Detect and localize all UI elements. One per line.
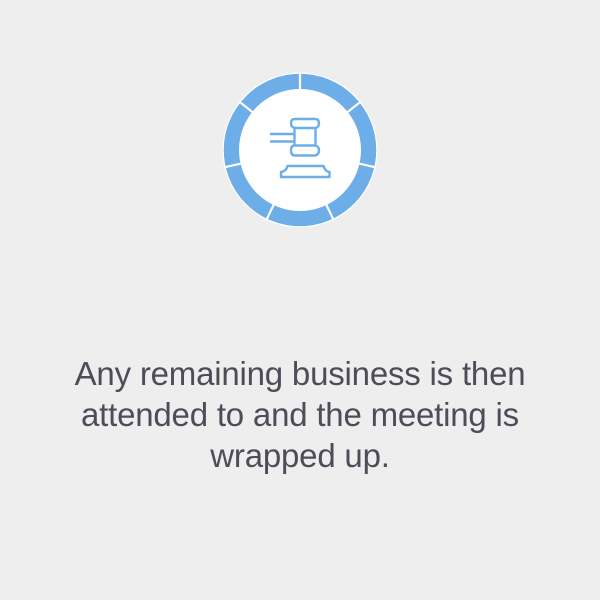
- caption text: attended to and the meeting is: [81, 396, 519, 433]
- caption text: wrapped up.: [210, 437, 390, 474]
- icon: gavel: [270, 119, 330, 177]
- ring: seven blue segments: [222, 72, 378, 228]
- inner white disc: [239, 89, 361, 211]
- caption text: [74, 355, 525, 474]
- caption text: Any remaining business is then: [75, 355, 525, 392]
